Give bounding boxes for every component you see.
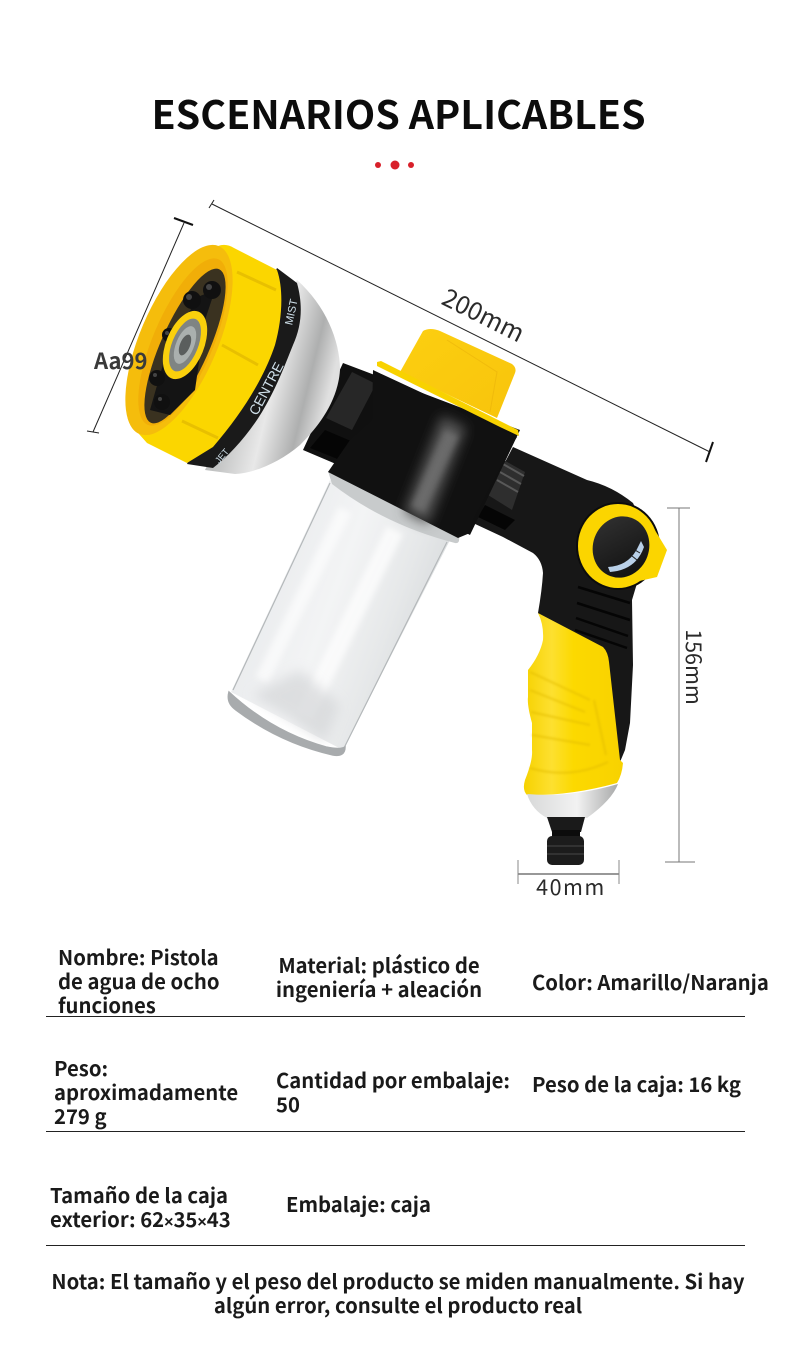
note: Nota: El tamaño y el peso del producto se miden manualmente. Si hay	[51, 1265, 745, 1295]
dimension: 40mm	[518, 860, 619, 902]
spec: embalaje: Embalaje: caja	[286, 1188, 431, 1218]
handle body	[473, 447, 650, 762]
spec: peso: aproximadamente	[54, 1076, 238, 1106]
yellow shell	[131, 245, 281, 463]
dimension: 200mm	[209, 200, 713, 462]
grip ribs	[530, 672, 608, 773]
spec: cantidad: Cantidad por embalaje:	[276, 1064, 510, 1094]
dial labels: MIST	[283, 298, 301, 326]
spec: peso: Peso:	[54, 1052, 108, 1082]
yellow knob	[377, 329, 519, 436]
handle grooves	[575, 587, 630, 648]
spray gun	[103, 231, 667, 865]
foam cylinder	[228, 471, 459, 755]
hose connector	[547, 817, 585, 865]
dial labels: CENTRE	[246, 359, 287, 418]
note: algún error, consulte el producto real	[214, 1289, 582, 1319]
note	[51, 1265, 745, 1319]
product diagram	[86, 160, 714, 902]
watermark label: Aa99	[93, 344, 147, 376]
grip	[524, 613, 623, 795]
spec: tamaño	[50, 1179, 231, 1233]
dimension: 40mm: 40mm	[536, 871, 606, 902]
spec: cantidad	[276, 1064, 510, 1118]
dial labels	[213, 298, 301, 465]
spec: peso	[54, 1052, 238, 1130]
spec: nombre: funciones	[58, 989, 156, 1019]
spec: tamaño: exterior: 62×35×43	[50, 1203, 231, 1233]
dimension: 200mm: 200mm	[437, 278, 531, 350]
central block	[328, 370, 517, 538]
dial labels: JET	[213, 446, 231, 465]
spec: material: ingeniería + aleación	[276, 973, 482, 1003]
decorative dots	[375, 160, 414, 170]
spec: nombre	[58, 941, 220, 1019]
nozzle face	[103, 231, 255, 449]
spec: peso de la caja: Peso de la caja: 16 kg	[532, 1068, 741, 1098]
dimension: nozzle diameter	[87, 218, 193, 433]
neck	[303, 363, 520, 535]
spec: color: Color: Amarillo/Naranja	[532, 966, 769, 996]
silver collar	[527, 784, 618, 818]
spec: nombre: Nombre: Pistola	[58, 941, 219, 971]
dial	[576, 502, 667, 590]
dimension: 156mm	[665, 508, 710, 862]
title: ESCENARIOS APLICABLES	[151, 84, 646, 141]
spec: cantidad: 50	[276, 1088, 300, 1118]
dimension: 156mm: 156mm	[679, 629, 710, 705]
spec: material	[276, 949, 482, 1003]
spec: peso: 279 g	[54, 1100, 107, 1130]
black band	[187, 268, 301, 468]
spec: tamaño: Tamaño de la caja	[50, 1179, 228, 1209]
silver bowl	[205, 280, 340, 474]
spec: material: Material: plástico de	[278, 949, 480, 979]
spec: nombre: de agua de ocho	[58, 965, 220, 995]
rear collar	[478, 458, 525, 530]
